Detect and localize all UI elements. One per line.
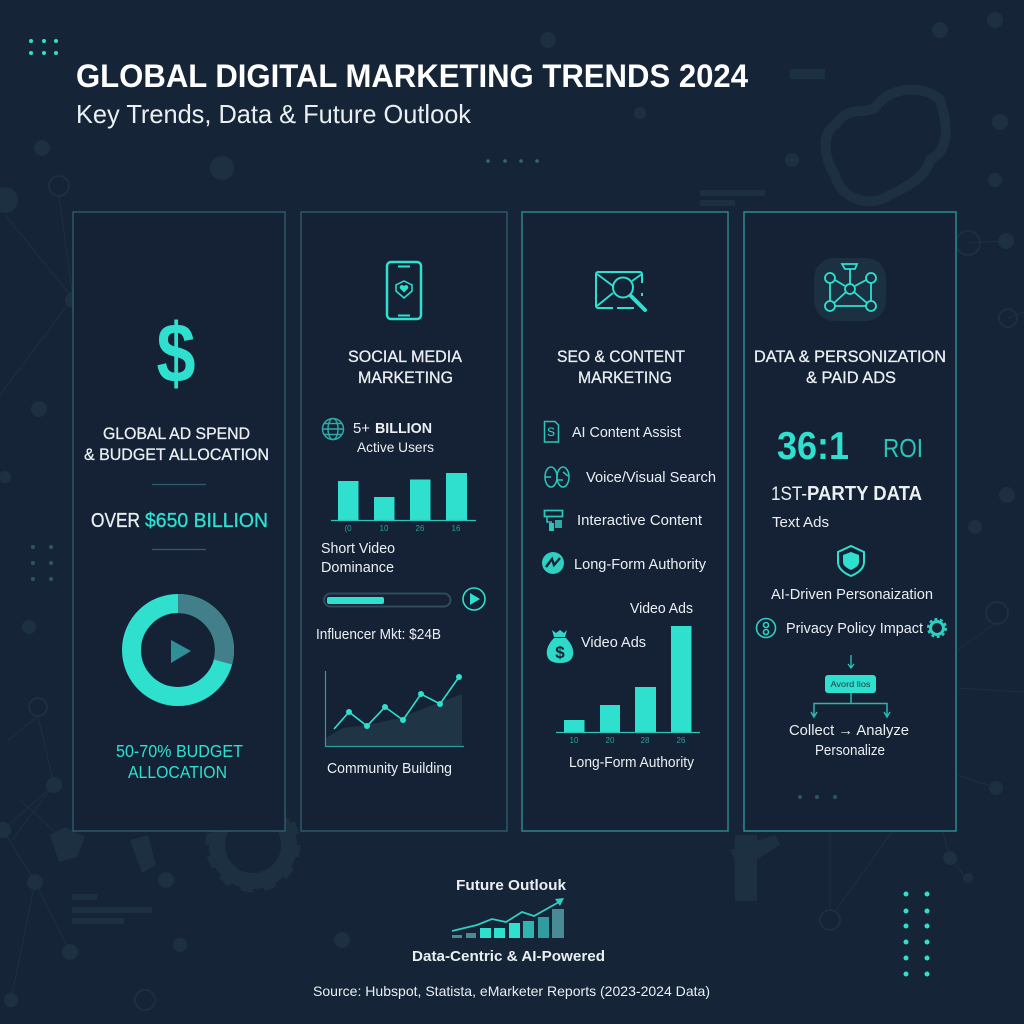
decorative dots: left margin bbox=[31, 545, 53, 581]
subtitle: Key Trends, Data & Future Outlook bbox=[76, 99, 472, 129]
footer: data-centric and ai-powered: Data-Centric & AI-Powered bbox=[412, 948, 605, 965]
label: privacy policy impact: Privacy Policy Impact bbox=[786, 621, 923, 637]
icon: shield bbox=[838, 546, 864, 576]
bar chart: video ads growth: 26 bbox=[677, 736, 686, 745]
list item: ai content assist bbox=[544, 422, 681, 442]
donut chart: budget allocation bbox=[132, 604, 224, 696]
decorative dots: under header bbox=[486, 159, 539, 163]
label: influencer market: Influencer Mkt: $24B bbox=[316, 627, 441, 643]
panel heading: social media: SOCIAL MEDIA bbox=[348, 347, 463, 366]
panel heading: social media bbox=[348, 347, 463, 387]
label: text ads: Text Ads bbox=[772, 515, 829, 531]
panel heading: seo and content: MARKETING bbox=[578, 368, 672, 387]
panel heading: seo and content bbox=[557, 347, 685, 387]
flow box: Avord lios bbox=[830, 680, 870, 689]
list item: ai content assist: S bbox=[547, 425, 555, 439]
label: 1st-party data: PARTY DATA bbox=[807, 483, 922, 505]
arrow: down to process box bbox=[848, 655, 854, 668]
bar chart: active users: 26 bbox=[416, 524, 425, 533]
label: community building: Community Building bbox=[327, 761, 452, 777]
bar chart: video ads growth bbox=[556, 626, 700, 745]
panel heading: global ad spend: GLOBAL AD SPEND bbox=[103, 424, 250, 443]
stat: 36:1 roi: 36:1 bbox=[777, 425, 849, 468]
label: ai-driven personalization: AI-Driven Personaization bbox=[771, 587, 933, 603]
list item: long-form authority: Long-Form Authority bbox=[574, 557, 707, 573]
footer: future outlook heading: Future Outlouk bbox=[456, 877, 567, 894]
line chart: community building bbox=[326, 671, 464, 746]
decorative dots: bottom right bbox=[904, 892, 930, 976]
stat: 5+ billion active users: BILLION bbox=[375, 420, 432, 437]
list item: voice and visual search: Voice/Visual Search bbox=[586, 470, 716, 486]
panel heading: social media: MARKETING bbox=[358, 368, 453, 387]
icon: privacy bbox=[756, 618, 776, 638]
stat: over $650 billion: $650 BILLION bbox=[145, 510, 268, 532]
list item: voice and visual search bbox=[545, 467, 716, 487]
icon: globe bbox=[322, 418, 344, 440]
panel heading: data and personalization: DATA & PERSONIZATION bbox=[754, 347, 946, 366]
stat: 5+ billion active users bbox=[353, 420, 434, 455]
panel heading: global ad spend bbox=[84, 424, 269, 464]
label: short video dominance: Dominance bbox=[321, 560, 394, 576]
stat: over $650 billion bbox=[91, 510, 268, 532]
label: 1st-party data: 1ST- bbox=[771, 484, 807, 505]
decorative dots: top left bbox=[29, 39, 58, 55]
bar chart: active users bbox=[331, 473, 476, 533]
label: long-form authority: Long-Form Authority bbox=[569, 755, 695, 771]
label: short video dominance bbox=[321, 541, 395, 576]
bar chart: active users: 10 bbox=[380, 524, 389, 533]
icon: envelope with magnifier bbox=[596, 272, 645, 310]
stat: 36:1 roi: ROI bbox=[883, 433, 923, 463]
label: collect analyze personalize: Collect → Analyze bbox=[789, 723, 909, 739]
label: short video dominance: Short Video bbox=[321, 541, 395, 557]
arrows: branching flow bbox=[811, 693, 890, 717]
bar chart: video ads growth: 28 bbox=[641, 736, 650, 745]
icon: money bag: $ bbox=[555, 643, 565, 662]
chart: future outlook growth bbox=[452, 898, 564, 938]
bar chart: active users: 16 bbox=[452, 524, 461, 533]
decorative dots: panel bottom bbox=[798, 795, 837, 799]
caption: 50-70% budget allocation: 50-70% BUDGET bbox=[116, 741, 243, 761]
icon: smartphone bbox=[387, 262, 421, 319]
panel: seo and content marketing bbox=[522, 212, 728, 831]
stat: 36:1 roi bbox=[777, 425, 923, 468]
bar chart: video ads growth: 10 bbox=[570, 736, 579, 745]
panel: social media marketing bbox=[301, 212, 507, 831]
flow box bbox=[825, 675, 876, 693]
list item: ai content assist: AI Content Assist bbox=[572, 425, 681, 441]
stat: 5+ billion active users: 5+ bbox=[353, 420, 370, 437]
panel heading: seo and content: SEO & CONTENT bbox=[557, 347, 685, 366]
label: video ads: Video Ads bbox=[581, 635, 646, 651]
list item: long-form authority bbox=[542, 552, 707, 574]
bar chart: video ads growth: 20 bbox=[606, 736, 615, 745]
icon: money bag bbox=[547, 630, 573, 663]
progress bar with play button bbox=[324, 588, 485, 610]
panel: data and personalization bbox=[744, 212, 956, 831]
title: GLOBAL DIGITAL MARKETING TRENDS 2024 bbox=[76, 58, 748, 94]
caption: 50-70% budget allocation bbox=[116, 741, 243, 782]
panel heading: data and personalization: & PAID ADS bbox=[806, 368, 896, 387]
label: collect analyze personalize bbox=[789, 723, 909, 759]
panel heading: global ad spend: & BUDGET ALLOCATION bbox=[84, 445, 269, 464]
panel: global ad spend bbox=[73, 212, 285, 831]
icon: data network bbox=[814, 258, 886, 321]
bar chart: active users: (0 bbox=[344, 524, 352, 533]
source line: Source: Hubspot, Statista, eMarketer Reports (2023-2024 Data) bbox=[313, 983, 710, 999]
icon: dollar sign: $ bbox=[156, 306, 196, 400]
panel heading: data and personalization bbox=[754, 347, 946, 387]
label: video ads top: Video Ads bbox=[630, 601, 693, 617]
stat: 5+ billion active users: Active Users bbox=[357, 439, 434, 455]
list item: interactive content: Interactive Content bbox=[577, 513, 702, 529]
icon: gear bbox=[928, 619, 946, 637]
stat: over $650 billion: OVER bbox=[91, 510, 140, 532]
label: collect analyze personalize: Personalize bbox=[815, 743, 885, 759]
caption: 50-70% budget allocation: ALLOCATION bbox=[128, 762, 227, 782]
list item: interactive content bbox=[544, 510, 702, 531]
